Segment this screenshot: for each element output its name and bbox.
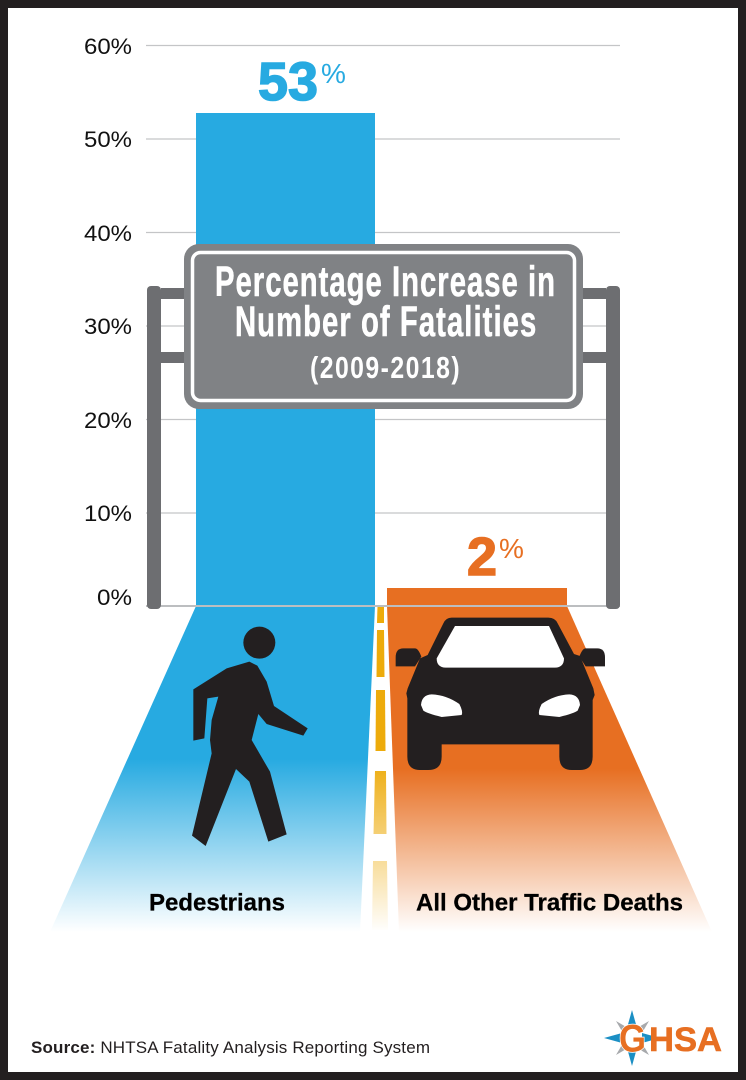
y axis labels: 20% xyxy=(84,408,132,433)
road centre dashes xyxy=(372,606,388,930)
icon: pedestrian xyxy=(192,627,308,846)
value label: 2%: 2 xyxy=(467,527,497,587)
y axis labels: 0% xyxy=(97,585,132,610)
bar: other traffic deaths 2% xyxy=(387,588,567,606)
icon: car xyxy=(396,618,605,770)
sign posts left xyxy=(147,286,185,609)
value label: 2% xyxy=(467,527,524,587)
GHSA logo: HSA xyxy=(649,1021,722,1059)
y axis labels: 30% xyxy=(84,314,132,339)
road: pedestrians lane xyxy=(50,606,375,932)
road sign title xyxy=(184,244,583,409)
lane label: All Other Traffic Deaths: All Other Traffic Deaths xyxy=(416,890,683,916)
y axis labels: 40% xyxy=(84,221,132,246)
y axis labels xyxy=(84,34,132,610)
source line: Source: NHTSA Fatality Analysis Reporting System xyxy=(31,1038,430,1057)
value label: 53%: 53 xyxy=(258,52,318,112)
GHSA logo: G xyxy=(619,1018,646,1060)
lane label: Pedestrians: Pedestrians xyxy=(149,890,285,916)
road sign title: Percentage Increase in xyxy=(215,257,555,305)
GHSA logo xyxy=(604,1010,722,1066)
road sign title: (2009-2018) xyxy=(310,350,460,385)
y axis labels: 10% xyxy=(84,501,132,526)
road sign title: Number of Fatalities xyxy=(235,297,536,345)
sign posts right xyxy=(582,286,620,609)
value label: 2%: % xyxy=(499,533,524,564)
chart baseline xyxy=(146,605,620,607)
y axis labels: 60% xyxy=(84,34,132,59)
value label: 53% xyxy=(258,52,346,112)
value label: 53%: % xyxy=(321,58,346,89)
road: other traffic lane xyxy=(387,606,712,932)
bar: pedestrians 53% xyxy=(196,113,375,606)
y axis labels: 50% xyxy=(84,127,132,152)
